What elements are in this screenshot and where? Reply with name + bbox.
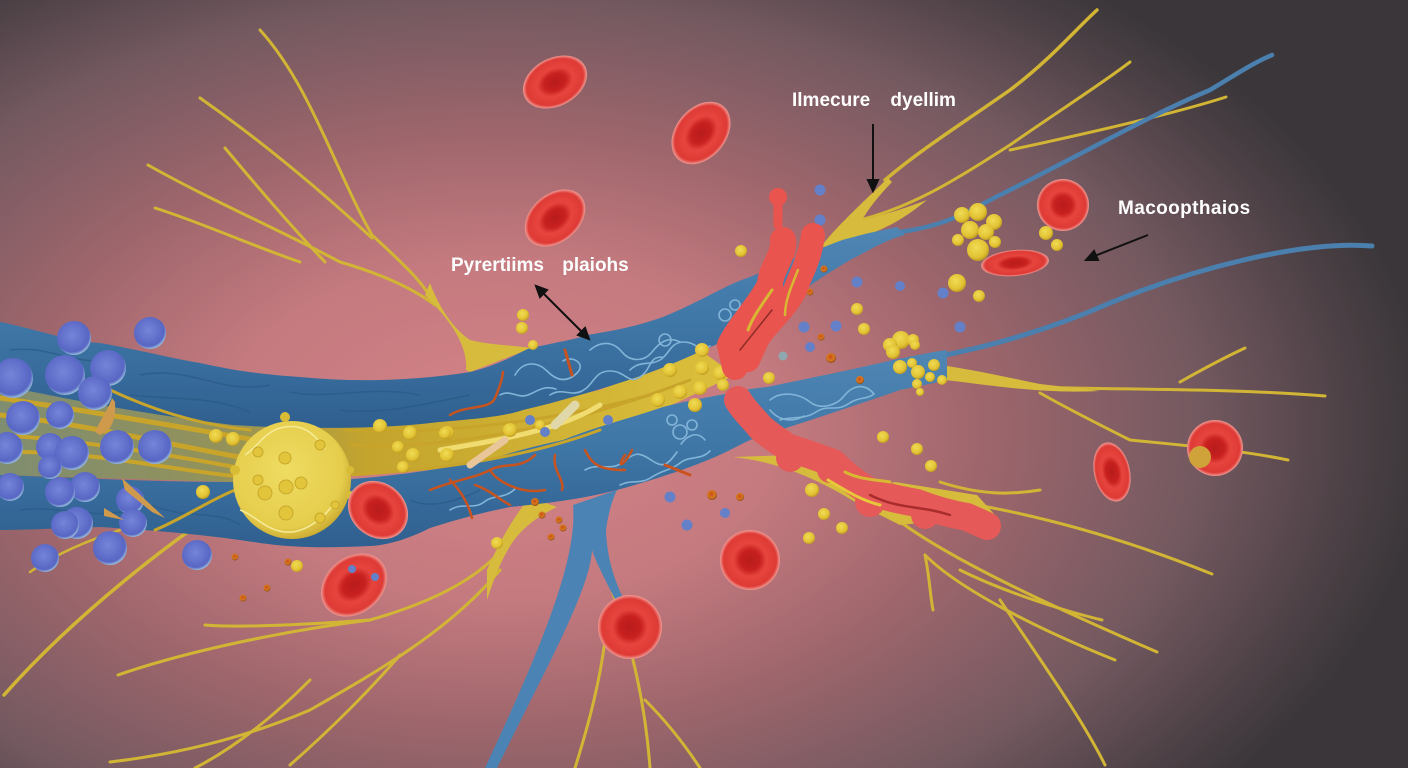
yellow lumen xyxy=(0,350,735,482)
label: Macoopthaios: Macoopthaios xyxy=(1118,198,1251,219)
red blood cells xyxy=(308,45,1243,659)
label: Ilmecure dyellim: Ilmecure dyellim xyxy=(792,90,956,111)
vessel surface creases xyxy=(10,349,480,525)
yellow cell cluster mid right xyxy=(883,331,947,396)
arrow: left-down xyxy=(1086,235,1148,260)
large yellow cell xyxy=(230,412,354,539)
orange shards xyxy=(95,398,165,520)
yellow cell cluster upper right xyxy=(952,203,1002,261)
thin blue branches xyxy=(900,55,1372,358)
red tangled fibres xyxy=(430,350,690,518)
yellow strands in lumen xyxy=(0,380,690,530)
red clump upper xyxy=(730,188,813,367)
arrow: double-headed xyxy=(536,286,589,339)
small blue and orange particles xyxy=(232,184,966,602)
vessel upper xyxy=(0,227,905,428)
red clump lower xyxy=(738,400,987,529)
arrow: down xyxy=(868,124,878,191)
yellow stem junctions xyxy=(425,178,1100,600)
vessel lower xyxy=(0,350,947,547)
vessel swirls xyxy=(450,300,874,510)
blue cell cluster xyxy=(0,317,212,572)
pale fibres in lumen xyxy=(470,405,575,465)
lower blue vessel branch xyxy=(485,490,624,768)
yellow particles xyxy=(196,226,1063,572)
label: Pyrertiims plaiohs: Pyrertiims plaiohs xyxy=(451,255,629,276)
